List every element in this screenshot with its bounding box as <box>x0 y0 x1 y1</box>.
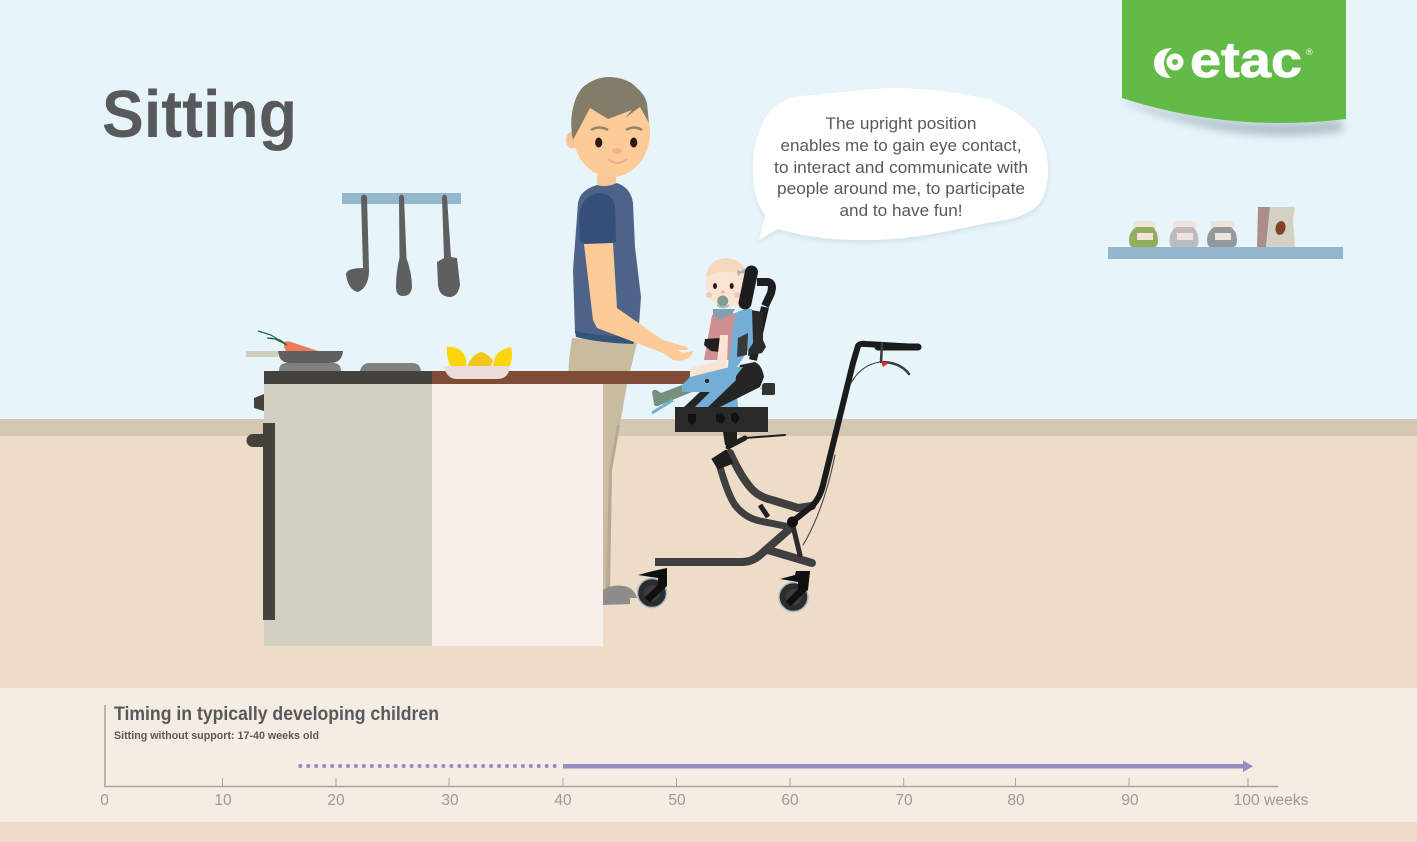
face <box>573 89 650 177</box>
bubble text: people around me, to participate <box>777 179 1025 198</box>
hair <box>571 77 649 140</box>
eyes <box>595 138 637 148</box>
axis labels: 100 weeks <box>1234 792 1309 809</box>
headrest <box>745 272 752 303</box>
carrot <box>258 331 318 351</box>
bubble text: enables me to gain eye contact, <box>780 136 1022 155</box>
registered mark: ® <box>1306 47 1313 57</box>
neck <box>597 172 616 187</box>
left burner <box>279 363 341 371</box>
base bar <box>655 526 793 562</box>
icon: ladle <box>346 194 369 292</box>
axis labels: 30 <box>441 792 459 809</box>
stove and counter <box>246 331 690 646</box>
arrow: 40 weeks onward <box>563 760 1253 772</box>
shirt hem <box>575 331 639 344</box>
oven knob <box>254 394 264 411</box>
axis labels: 10 <box>214 792 232 809</box>
back plate <box>748 310 766 356</box>
lemons <box>447 347 512 367</box>
icon: spatula <box>437 194 460 297</box>
logo wordmark: etac <box>1190 32 1302 88</box>
icon: spoon <box>396 194 412 296</box>
arm and hand <box>584 243 693 361</box>
person: legs behind counter <box>560 338 637 605</box>
baby nose <box>721 290 725 294</box>
sleeve <box>579 193 616 244</box>
bow <box>737 268 746 276</box>
rear wheel <box>779 571 810 612</box>
seat pin <box>705 379 709 383</box>
adjustment knob <box>760 383 775 395</box>
front wheel <box>638 568 667 608</box>
axis labels: 60 <box>781 792 799 809</box>
chest strap <box>704 338 720 352</box>
seat back blue <box>700 309 753 407</box>
brake lever <box>881 343 909 374</box>
short strut <box>760 505 768 517</box>
axis labels <box>100 792 1309 809</box>
bubble text <box>774 114 1028 220</box>
rear leg <box>793 526 800 555</box>
axis labels: 70 <box>895 792 913 809</box>
nose <box>612 148 622 154</box>
seat cushion <box>682 367 743 407</box>
seat base <box>675 407 768 432</box>
axis labels: 50 <box>668 792 686 809</box>
utensil rack <box>342 193 461 297</box>
seat strut <box>684 362 763 407</box>
seat mount <box>723 432 785 447</box>
axis labels: 0 <box>100 792 109 809</box>
pan handle <box>246 351 278 357</box>
baby head <box>706 258 747 308</box>
timeline panel <box>0 688 1417 822</box>
lower tube <box>720 467 790 527</box>
timeline subheading: Sitting without support: 17-40 weeks old <box>114 730 319 742</box>
upper tube <box>730 453 812 508</box>
oven handle <box>246 423 275 620</box>
seat back inset <box>737 333 748 357</box>
coffee bag <box>1257 207 1295 247</box>
shelf with jars and coffee bag <box>1108 207 1343 259</box>
bubble text: to interact and communicate with <box>774 158 1028 177</box>
timeline heading: Timing in typically developing children <box>114 704 439 725</box>
baby eyes <box>713 283 734 289</box>
right burner <box>360 363 421 371</box>
person: torso and head <box>566 77 693 361</box>
red brake marker <box>881 361 889 367</box>
dotted range: 17 to 40 weeks <box>300 764 558 768</box>
axis labels: 90 <box>1121 792 1139 809</box>
push handle <box>792 344 918 522</box>
bubble text: The upright position <box>826 114 976 133</box>
jar: green <box>1129 221 1158 247</box>
axis labels: 20 <box>327 792 345 809</box>
leg <box>652 385 692 406</box>
pivot <box>788 517 798 527</box>
cheeks <box>706 292 740 298</box>
shoe <box>603 586 637 605</box>
brake cable <box>803 362 880 545</box>
baby arm <box>690 335 728 375</box>
logo symbol <box>1154 48 1184 78</box>
jar: dark grey <box>1207 221 1237 247</box>
pacifier <box>717 296 729 308</box>
bowl <box>444 366 510 379</box>
rear bar <box>768 550 812 563</box>
eyebrows <box>591 128 642 130</box>
bubble text: and to have fun! <box>840 201 962 220</box>
baby in seat <box>652 258 775 432</box>
axis labels: 80 <box>1007 792 1025 809</box>
logo: etac green banner <box>1122 0 1346 136</box>
footrest <box>652 400 673 413</box>
headrest post and bracket <box>753 282 772 360</box>
axis <box>105 705 1278 786</box>
rear support cushion <box>728 362 764 400</box>
jar: grey <box>1170 221 1198 247</box>
ear <box>566 132 578 148</box>
axis labels: 40 <box>554 792 572 809</box>
speech bubble <box>753 88 1049 243</box>
torso <box>573 183 641 343</box>
title: Sitting <box>102 77 297 152</box>
collar <box>713 309 735 320</box>
mobility frame <box>655 343 918 563</box>
smile <box>608 159 627 163</box>
pan <box>278 351 343 363</box>
baby shirt <box>704 313 735 360</box>
joint plate <box>712 450 733 469</box>
